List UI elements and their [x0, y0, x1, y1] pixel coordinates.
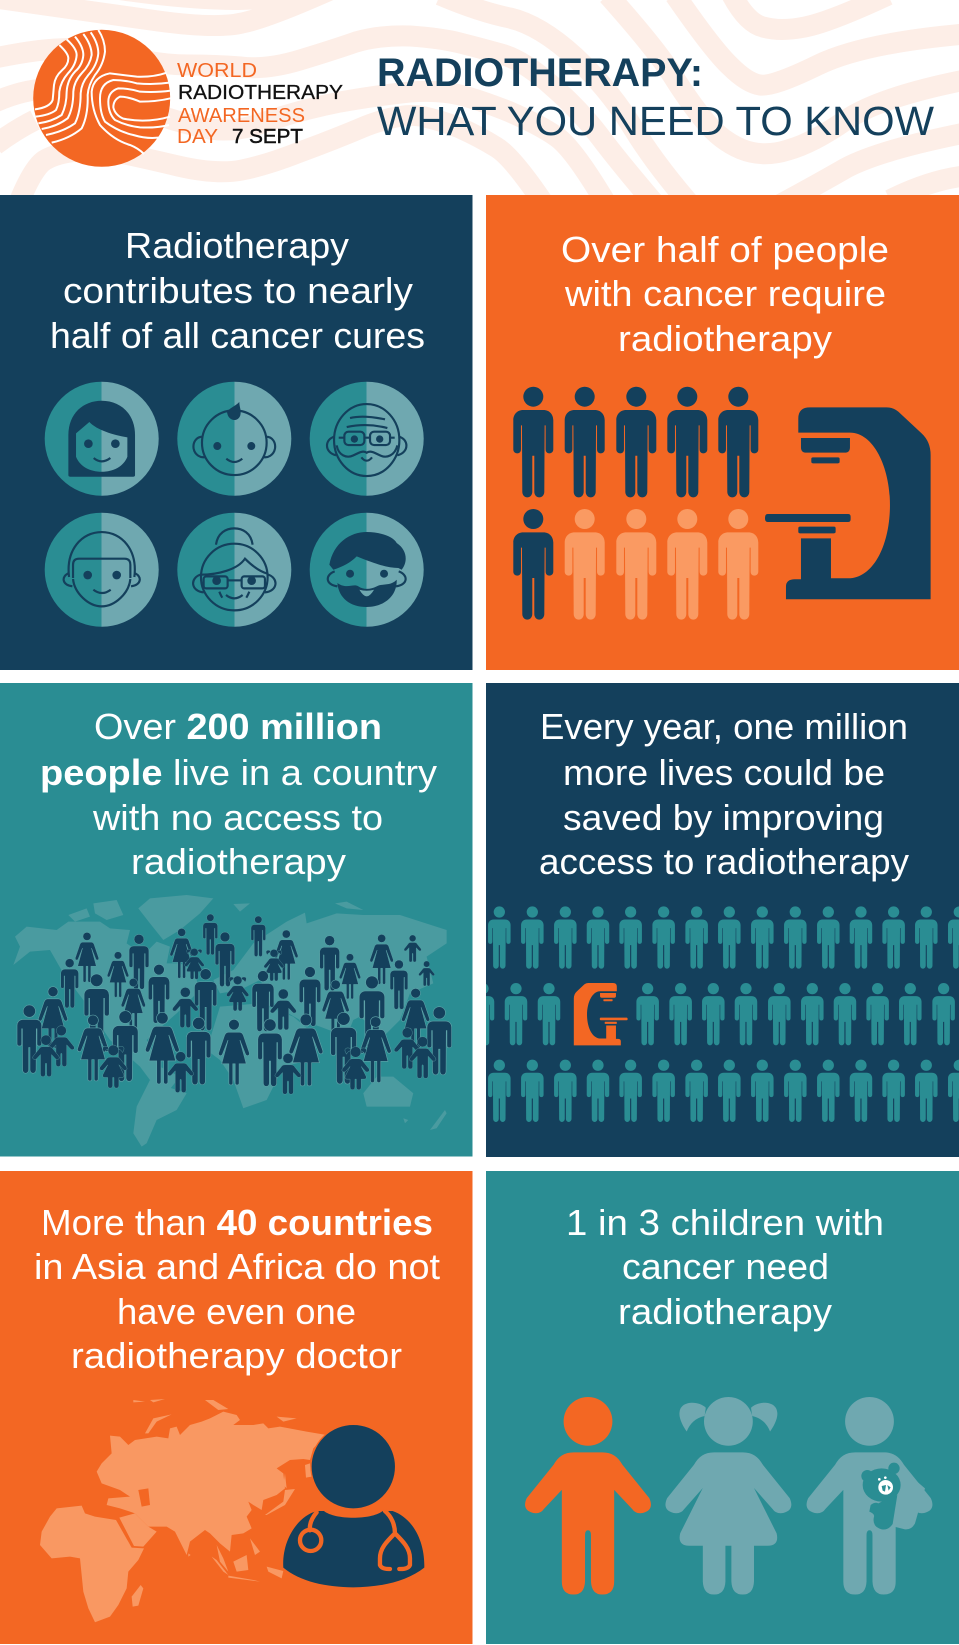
- panel: 40 countries: [0, 1171, 472, 1644]
- heading: 40 countries: in Asia and Africa do not: [34, 1246, 440, 1287]
- heading: cancer cures: contributes to nearly: [63, 270, 413, 311]
- icon: boy face: [45, 513, 159, 627]
- heading: 40 countries: radiotherapy doctor: [71, 1335, 402, 1376]
- heading: over half of people: Over half of people: [561, 229, 889, 270]
- heading: cancer cures: Radiotherapy: [125, 225, 349, 266]
- heading: 200 million people: people live in a country: [40, 752, 437, 793]
- icon: doctor with stethoscope: [283, 1424, 424, 1587]
- icon: old man face: [310, 382, 424, 496]
- heading: 200 million people: with no access to: [92, 797, 383, 838]
- title: WHAT YOU NEED TO KNOW: [377, 98, 934, 144]
- heading: over half of people: [561, 229, 889, 359]
- icon: woman face: [45, 382, 159, 496]
- title: RADIOTHERAPY:: [377, 51, 703, 95]
- heading: 200 million people: radiotherapy: [131, 841, 346, 882]
- heading: one million lives: saved by improving: [563, 797, 884, 838]
- logo text: DAY: [177, 126, 218, 148]
- heading: 1 in 3 children: cancer need: [622, 1246, 829, 1287]
- title: [377, 51, 934, 144]
- world map: [13, 895, 447, 1147]
- header background waves: [0, 0, 959, 210]
- logo text: WORLD: [177, 60, 257, 82]
- icon: small orange machine: [574, 983, 628, 1045]
- heading: 200 million people: [40, 706, 437, 882]
- panel: cancer cures: [0, 195, 472, 670]
- logo emblem: [33, 30, 171, 167]
- logo text: 7 SEPT: [232, 126, 303, 148]
- icon: child with teddy bear: [807, 1397, 932, 1595]
- icon: bearded man face: [310, 513, 424, 627]
- heading: 1 in 3 children: radiotherapy: [618, 1291, 832, 1332]
- logo text: RADIOTHERAPY: [178, 82, 343, 104]
- heading: cancer cures: half of all cancer cures: [50, 315, 425, 356]
- icon: orange boy: [525, 1397, 651, 1595]
- heading: 40 countries: have even one: [117, 1291, 356, 1332]
- panel: 200 million people: [0, 683, 472, 1156]
- heading: 1 in 3 children: 1 in 3 children with: [566, 1202, 884, 1243]
- heading: over half of people: with cancer require: [564, 273, 886, 314]
- heading: one million lives: [539, 706, 909, 882]
- pictogram: rows of people with machine: [472, 906, 959, 1122]
- icon: light girl: [665, 1397, 791, 1595]
- panel: children with cancer: [486, 1171, 959, 1644]
- heading: over half of people: radiotherapy: [618, 318, 832, 359]
- panel: one million more lives: [472, 683, 959, 1157]
- logo text: AWARENESS: [178, 105, 305, 127]
- panel: people requiring radiotherapy: [486, 195, 959, 670]
- icon: grandmother face: [177, 513, 291, 627]
- heading: 200 million people: Over 200 million: [94, 706, 382, 747]
- heading: one million lives: access to radiotherapy: [539, 841, 909, 882]
- heading: 40 countries: [34, 1202, 440, 1376]
- heading: cancer cures: [50, 225, 425, 356]
- heading: one million lives: Every year, one million: [540, 706, 908, 747]
- map: Asia and Africa: [40, 1399, 327, 1622]
- logo text: [177, 60, 343, 148]
- heading: 1 in 3 children: [566, 1202, 884, 1332]
- icon: radiotherapy machine: [765, 407, 931, 599]
- logo: world radiotherapy awareness day: [33, 30, 343, 167]
- icon: baby face: [177, 382, 291, 496]
- heading: 40 countries: More than 40 countries: [41, 1202, 433, 1243]
- crowd of people: [17, 914, 452, 1094]
- pictogram: ten people, six highlighted: [513, 387, 758, 620]
- heading: one million lives: more lives could be: [563, 752, 885, 793]
